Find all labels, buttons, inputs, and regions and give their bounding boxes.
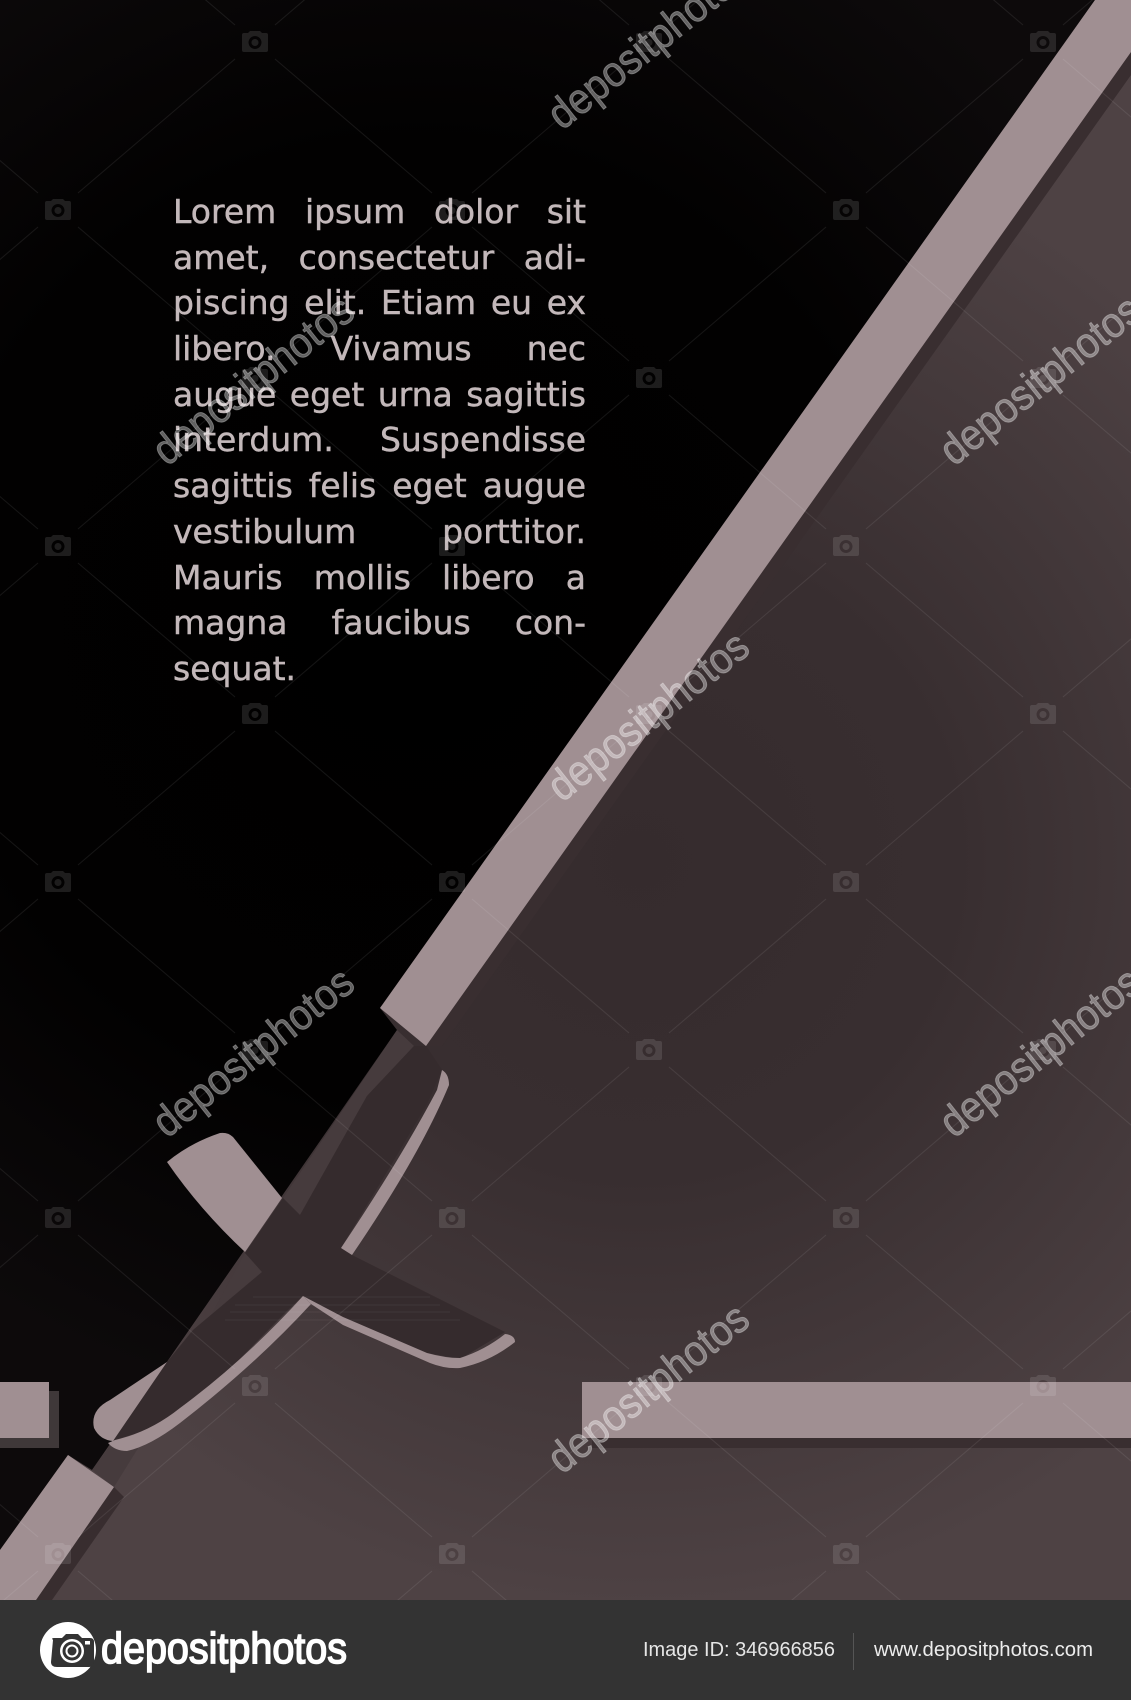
footer logo wordmark: depositphotos xyxy=(101,1624,347,1673)
hilt lower-right curved sliver xyxy=(303,1296,515,1368)
sword hilt xyxy=(92,1030,515,1487)
sword lower blade segment xyxy=(0,1455,114,1600)
hilt mid-tone lower band xyxy=(92,1253,262,1487)
right bar xyxy=(582,1382,1131,1438)
text block: lorem ipsum paragraph: magna faucibus con- xyxy=(173,603,586,642)
sword blade upper segment xyxy=(380,0,1131,1046)
text block: lorem ipsum paragraph: piscing elit. Etiam eu ex xyxy=(173,283,586,322)
hilt upper guard piece xyxy=(167,1133,282,1252)
hilt mid-tone upper band xyxy=(283,1030,414,1215)
text block: lorem ipsum paragraph: Mauris mollis libero a xyxy=(173,558,586,596)
right bar shadow xyxy=(592,1392,1131,1448)
icon: camera logo xyxy=(40,1622,96,1678)
watermark: depositphotos text repeats xyxy=(143,0,1131,1483)
text block: lorem ipsum paragraph: libero. Vivamus nec xyxy=(173,329,586,368)
left bar shadow xyxy=(0,1391,59,1448)
hilt lower-left curved sliver xyxy=(108,1296,311,1451)
text block: lorem ipsum paragraph: amet, consectetur adi- xyxy=(173,238,586,277)
text block: lorem ipsum paragraph: augue eget urna sagittis xyxy=(173,375,586,414)
sword lower blade shadow xyxy=(36,1487,124,1600)
left bar xyxy=(0,1382,49,1438)
text block: lorem ipsum paragraph: sagittis felis eget augue xyxy=(173,466,586,505)
watermark: depositphotos text repeats: depositphotos xyxy=(143,286,363,475)
text block: lorem ipsum paragraph: Lorem ipsum dolor sit xyxy=(173,192,586,231)
footer bar xyxy=(0,1600,1131,1700)
watermark: depositphotos text repeats: depositphotos xyxy=(143,958,363,1147)
text block: lorem ipsum paragraph: interdum. Suspendisse xyxy=(173,420,586,459)
text block: lorem ipsum paragraph: sequat. xyxy=(173,649,296,688)
watermark: depositphotos text repeats: depositphotos xyxy=(538,622,758,811)
hilt left blob xyxy=(93,1362,167,1441)
text block: lorem ipsum paragraph xyxy=(173,192,586,688)
sword blade upper shadow xyxy=(426,52,1131,1046)
footer website url: www.depositphotos.com xyxy=(873,1638,1093,1661)
footer image id: Image ID: 346966856 xyxy=(643,1638,835,1661)
watermark: depositphotos text repeats: depositphotos xyxy=(538,1294,758,1483)
hilt right curved sliver xyxy=(341,1070,449,1255)
hilt dark body xyxy=(113,1046,505,1441)
text block: lorem ipsum paragraph: vestibulum porttitor. xyxy=(173,512,586,551)
